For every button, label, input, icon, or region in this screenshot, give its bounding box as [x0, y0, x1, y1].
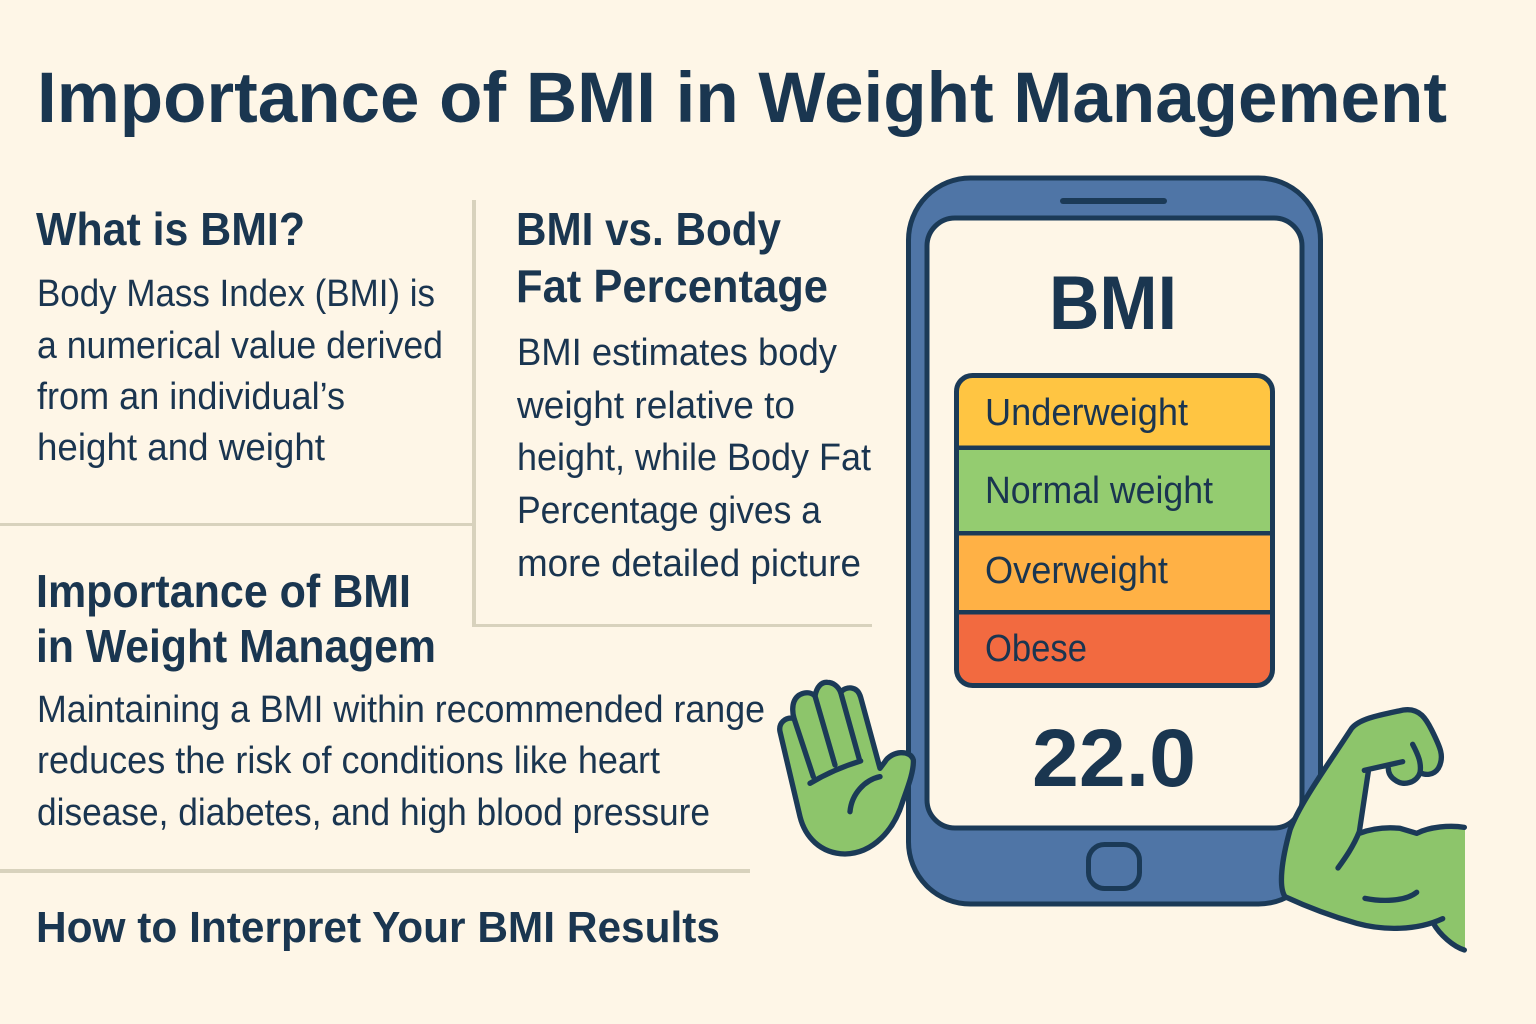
phone screen — [927, 218, 1302, 828]
text block: BMI vs body fat explanation — [516, 332, 871, 585]
text block: BMI vs body fat explanation: BMI estimates body — [517, 332, 837, 374]
category: obese — [957, 613, 1272, 686]
phone body — [908, 178, 1320, 904]
phone speaker — [1060, 198, 1167, 204]
text block: BMI vs body fat explanation: more detailed picture — [517, 543, 861, 585]
category: normal weight — [957, 448, 1272, 533]
text block: importance explanation: reduces the risk of conditions like heart — [37, 740, 660, 782]
screen title: BMI: BMI — [1049, 261, 1177, 346]
category: overweight — [957, 533, 1272, 613]
text block: BMI vs body fat explanation: height, while Body Fat — [517, 437, 871, 479]
text block: BMI definition: Body Mass Index (BMI) is — [37, 273, 435, 315]
text block: importance explanation: disease, diabetes, and high blood pressure — [37, 792, 710, 834]
text block: BMI vs body fat explanation: weight relative to — [516, 385, 795, 427]
heading: importance of BMI: Importance of BMI — [36, 565, 411, 617]
panel: importance of BMI — [36, 565, 765, 834]
text block: BMI definition: height and weight — [37, 427, 325, 469]
text block: importance explanation: Maintaining a BMI within recommended range — [37, 689, 765, 731]
icon: flexed arm — [1281, 710, 1465, 950]
heading: how to interpret: How to Interpret Your BMI Results — [36, 903, 720, 952]
text block: BMI vs body fat explanation: Percentage gives a — [517, 490, 822, 532]
category: underweight — [957, 376, 1272, 448]
heading: BMI vs body fat: BMI vs. Body — [516, 203, 781, 255]
category: overweight: Overweight — [985, 550, 1168, 592]
category: normal weight: Normal weight — [985, 470, 1213, 512]
title: Importance of BMI in Weight Management — [37, 59, 1447, 138]
text block: BMI definition — [37, 273, 443, 469]
phone home button — [1088, 844, 1140, 888]
icon: raised hand — [780, 682, 913, 854]
panel: BMI vs body fat percentage — [516, 203, 871, 585]
heading: BMI vs body fat — [516, 203, 828, 312]
BMI category table — [956, 376, 1272, 686]
heading: what is BMI: What is BMI? — [36, 203, 305, 255]
phone — [908, 178, 1320, 904]
panel: what is BMI — [36, 203, 443, 469]
text block: importance explanation — [37, 689, 765, 834]
text block: BMI definition: a numerical value derived — [37, 325, 443, 367]
category: obese: Obese — [985, 628, 1087, 670]
category: underweight: Underweight — [985, 392, 1188, 434]
BMI value: 22.0 — [1032, 713, 1196, 804]
heading: importance of BMI — [36, 565, 436, 672]
text block: BMI definition: from an individual’s — [37, 376, 345, 418]
heading: BMI vs body fat: Fat Percentage — [516, 260, 828, 312]
heading: importance of BMI: in Weight Managem — [36, 620, 436, 672]
